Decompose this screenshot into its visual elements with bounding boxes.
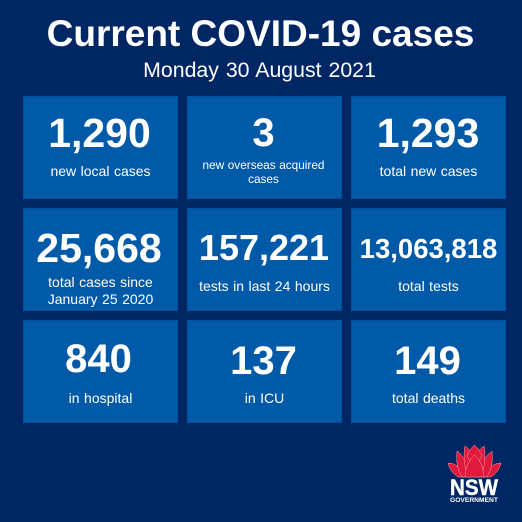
panel: in ICU xyxy=(187,320,342,423)
panel: total cases since January 25 2020: total cases since xyxy=(48,274,153,290)
panel: new overseas acquired cases xyxy=(187,96,342,199)
panel: new overseas acquired cases: cases xyxy=(248,172,279,186)
panel: total cases since January 25 2020: 25,668 xyxy=(36,225,162,271)
panel: in ICU: 137 xyxy=(230,339,297,383)
panel: in hospital: 840 xyxy=(65,337,132,381)
panel: total tests xyxy=(351,208,506,311)
panel: total tests: total tests xyxy=(398,278,459,294)
panel: in ICU: in ICU xyxy=(245,390,284,406)
panel: total new cases: total new cases xyxy=(380,163,477,179)
panel: total new cases xyxy=(351,96,506,199)
date subtitle: Monday 30 August 2021 xyxy=(143,58,376,82)
panel: total deaths: 149 xyxy=(394,339,461,383)
panel: tests in last 24 hours xyxy=(187,208,342,311)
panel: new overseas acquired cases: 3 xyxy=(252,111,275,155)
panel: new local cases: new local cases xyxy=(50,163,151,179)
panel: tests in last 24 hours: 157,221 xyxy=(199,227,329,268)
logo wordmark: NSW xyxy=(450,475,498,500)
panel: total new cases: 1,293 xyxy=(377,110,479,156)
panel: total deaths xyxy=(351,320,506,423)
panel: in hospital: in hospital xyxy=(69,390,132,406)
panel: total tests: 13,063,818 xyxy=(360,233,497,264)
panel: in hospital xyxy=(23,320,178,423)
panel: total deaths: total deaths xyxy=(392,390,465,406)
panel: total cases since January 25 2020: January 25 2020 xyxy=(48,291,153,307)
panel: new local cases xyxy=(23,96,178,199)
panel: new local cases: 1,290 xyxy=(48,110,151,156)
panel: tests in last 24 hours: tests in last 24 hours xyxy=(199,278,330,294)
title: Current COVID-19 cases xyxy=(47,13,474,54)
logo government text: GOVERNMENT xyxy=(450,498,498,504)
panel: total cases since January 25 2020 xyxy=(23,208,178,311)
panel: new overseas acquired cases: new overseas acquired xyxy=(203,158,324,172)
icon: NSW Government waratah logo xyxy=(448,445,502,504)
